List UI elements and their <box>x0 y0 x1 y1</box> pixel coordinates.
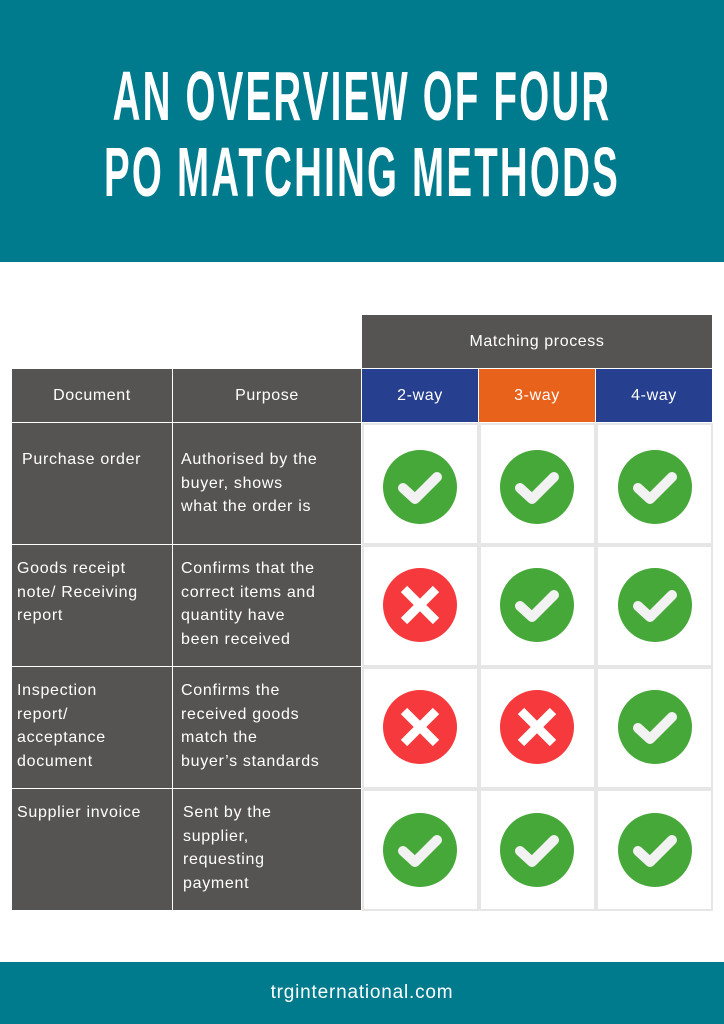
doc cell: inspection report: acceptance <box>17 729 106 746</box>
title <box>104 57 620 211</box>
purpose cell 1: buyer, shows <box>181 475 283 492</box>
header: 3-way <box>479 369 595 422</box>
icon: check r1c2 <box>500 450 574 524</box>
footer band <box>0 962 724 1024</box>
purpose cell 4: payment <box>183 875 249 892</box>
header: purpose: Purpose <box>235 386 299 404</box>
doc cell: inspection report: document <box>17 753 93 770</box>
header: document: Document <box>53 386 131 404</box>
row 4 <box>12 789 361 910</box>
icon: check r4c3 <box>618 813 692 887</box>
doc cell: goods receipt: note/ Receiving <box>17 584 138 601</box>
doc cell: inspection report <box>12 667 172 788</box>
doc cell: supplier invoice <box>12 789 172 910</box>
header: document <box>12 369 172 422</box>
icon: check r4c1 <box>383 813 457 887</box>
purpose cell 1 <box>173 423 361 544</box>
purpose cell 4: requesting <box>183 851 265 868</box>
icon: check r4c2 <box>500 813 574 887</box>
purpose cell 4: Sent by the <box>183 804 272 821</box>
purpose cell 1: what the order is <box>181 498 311 515</box>
purpose cell 3 <box>173 667 361 788</box>
header: matching process <box>362 315 712 368</box>
header: purpose <box>173 369 361 422</box>
icon: check r2c2 <box>500 568 574 642</box>
doc cell: purchase order <box>12 423 172 544</box>
purpose cell 1: Authorised by the <box>181 451 317 468</box>
footer band: trginternational.com <box>271 982 453 1003</box>
doc cell: inspection report: report/ <box>17 706 68 723</box>
row 3 <box>12 667 361 788</box>
table <box>12 315 712 422</box>
purpose cell 3: buyer’s standards <box>181 753 320 770</box>
purpose cell 4 <box>173 789 361 910</box>
purpose cell 2: been received <box>181 631 291 648</box>
icon: cross r2c1 <box>383 568 457 642</box>
header: 4-way <box>596 369 712 422</box>
icon: check r2c3 <box>618 568 692 642</box>
purpose cell 2: correct items and <box>181 584 316 601</box>
header: 2-way: 2-way <box>397 386 443 404</box>
purpose cell 4: supplier, <box>183 828 249 845</box>
header: 3-way: 3-way <box>514 386 560 404</box>
purpose cell 2 <box>173 545 361 666</box>
header band <box>0 0 724 262</box>
icon: check r1c3 <box>618 450 692 524</box>
purpose cell 3: received goods <box>181 706 299 723</box>
doc cell: inspection report: Inspection <box>17 682 97 699</box>
icon: cross r3c2 <box>500 690 574 764</box>
row 1 <box>12 423 361 544</box>
purpose cell 2: Confirms that the <box>181 560 315 577</box>
header: matching process: Matching process <box>470 332 604 350</box>
doc cell: goods receipt: Goods receipt <box>17 560 126 577</box>
purpose cell 3: match the <box>181 729 258 746</box>
row 2 <box>12 545 361 666</box>
doc cell: goods receipt: report <box>17 607 63 624</box>
doc cell: goods receipt <box>12 545 172 666</box>
doc cell: purchase order: Purchase order <box>22 451 141 468</box>
purpose cell 2: quantity have <box>181 607 285 624</box>
header: 4-way: 4-way <box>631 386 677 404</box>
header: 2-way <box>362 369 478 422</box>
doc cell: supplier invoice: Supplier invoice <box>17 804 141 821</box>
purpose cell 3: Confirms the <box>181 682 280 699</box>
icon: check r3c3 <box>618 690 692 764</box>
icon: check r1c1 <box>383 450 457 524</box>
title: AN OVERVIEW OF FOUR <box>113 57 611 135</box>
title: PO MATCHING METHODS <box>104 133 620 211</box>
icon: cross r3c1 <box>383 690 457 764</box>
